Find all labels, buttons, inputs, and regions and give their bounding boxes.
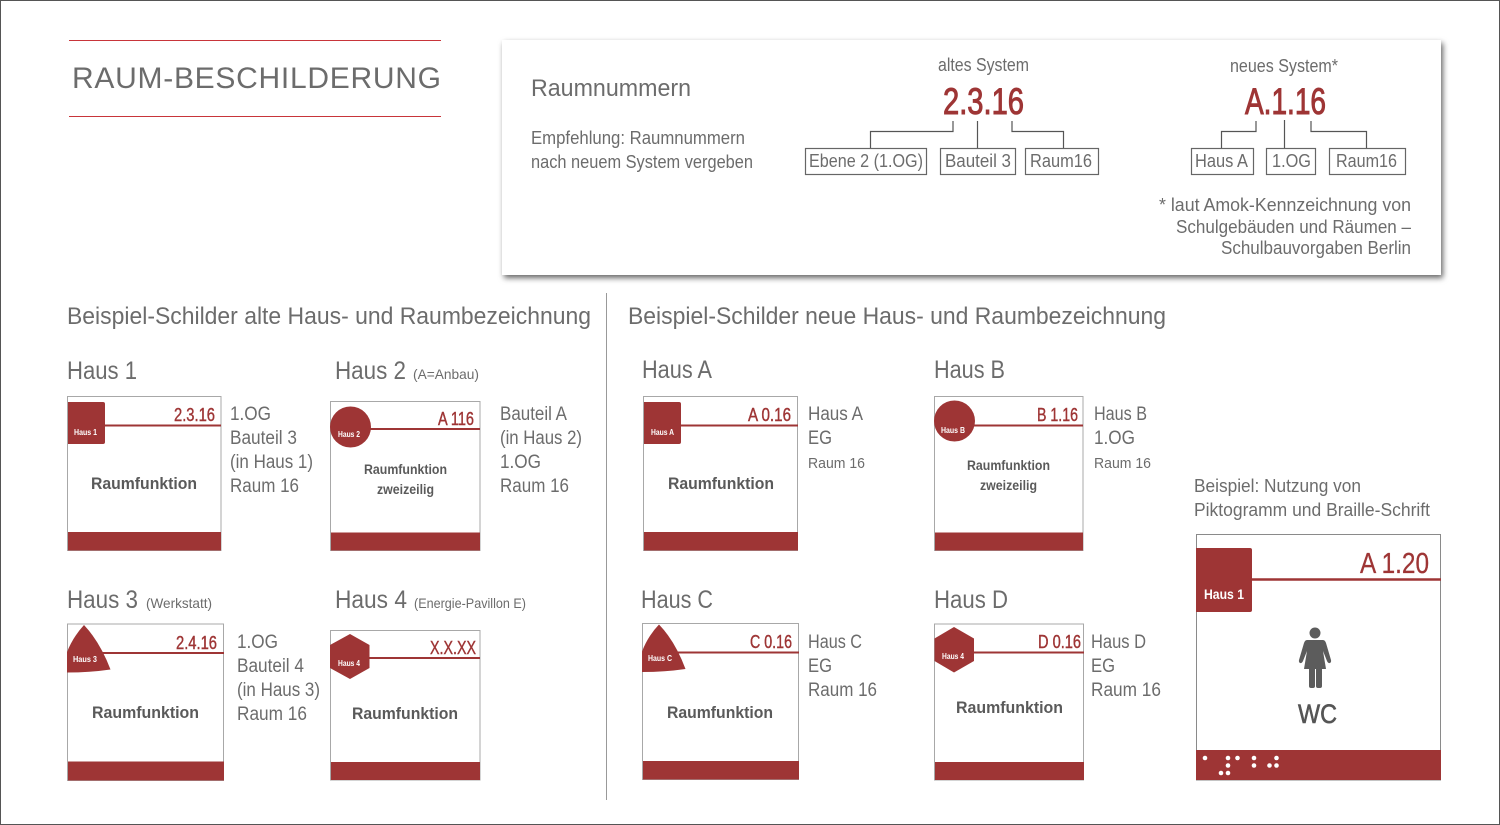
diagram: neues System xyxy=(1192,56,1406,174)
caption: Beispiel Piktogramm xyxy=(1194,476,1430,520)
description: Haus 1: 1.OG xyxy=(230,404,271,425)
description: Haus B xyxy=(1094,404,1151,472)
sign: Haus A xyxy=(644,396,798,550)
group: Haus 1: Haus 1 xyxy=(67,357,137,385)
sign: Haus C: C 0.16 xyxy=(750,632,792,652)
sign: Haus D: D 0.16 xyxy=(1038,632,1081,652)
group: Haus 3: (Werkstatt) xyxy=(146,595,212,611)
group: Haus A xyxy=(642,356,865,550)
text: Empfehlung: nach neuem System vergeben xyxy=(531,152,753,172)
sign: Haus B: Raumfunktion xyxy=(967,458,1050,473)
sign: Haus A: Haus A xyxy=(651,428,674,437)
description: Haus B: 1.OG xyxy=(1094,428,1135,449)
sign: Haus A: A 0.16 xyxy=(748,405,791,425)
group: Haus 1 xyxy=(67,357,313,550)
diagram: altes System: altes System xyxy=(938,55,1029,75)
sign: Haus 1: Raumfunktion xyxy=(91,474,197,493)
footnote: * laut Amok-Kennzeichnung von xyxy=(1159,195,1411,215)
group: Haus 2: (A=Anbau) xyxy=(413,366,479,382)
group: Haus C xyxy=(641,586,877,780)
sign: WC example: A 1.20 xyxy=(1360,548,1429,580)
description: Haus D: Haus D xyxy=(1091,632,1146,653)
group: Haus 2: Haus 2 xyxy=(335,357,406,385)
description: Haus 3 xyxy=(237,632,320,725)
group: Haus B: Haus B xyxy=(934,356,1005,384)
sign: Haus 4: Raumfunktion xyxy=(352,704,458,723)
group: Haus 2 xyxy=(330,357,582,550)
sign: Haus D: Raumfunktion xyxy=(956,698,1063,717)
description: Haus 1: Bauteil 3 xyxy=(230,428,297,449)
group: Haus C: Haus C xyxy=(641,586,713,614)
sign: Haus 2: Haus 2 xyxy=(338,430,360,439)
description: Haus A: Haus A xyxy=(808,404,863,425)
sign: Haus 4: X.X.XX xyxy=(430,638,476,658)
description: Haus B: Raum 16 xyxy=(1094,455,1151,472)
group: Haus B xyxy=(934,356,1151,550)
group: Haus 4: (Energie-Pavillon E) xyxy=(414,595,526,611)
label: WC: WC xyxy=(1298,699,1337,729)
sign: Haus 4 xyxy=(330,630,480,780)
footnote: Schulgebäuden und Räumen – xyxy=(1176,217,1411,237)
footnote xyxy=(1159,195,1411,258)
diagram: neues System: A.1.16 xyxy=(1245,81,1326,122)
diagram: altes System xyxy=(806,55,1098,174)
title: RAUM-BESCHILDERUNG xyxy=(72,62,441,95)
heading: neue Bezeichnung: Beispiel-Schilder neue Haus- und Raumbezeichnung xyxy=(628,303,1166,330)
description: Haus A: Raum 16 xyxy=(808,455,865,472)
group: Haus A: Haus A xyxy=(642,356,712,384)
diagram: neues System: neues System* xyxy=(1230,56,1338,76)
sign: Haus D: Haus 4 xyxy=(942,652,964,661)
sign: Haus C: Raumfunktion xyxy=(667,703,773,722)
group: Haus D xyxy=(934,586,1161,780)
text: Empfehlung: Empfehlung: Raumnummern xyxy=(531,128,745,148)
sign: Haus 2: zweizeilig xyxy=(377,482,434,497)
diagram: neues System: Haus A xyxy=(1195,151,1248,171)
group: Haus 3: Haus 3 xyxy=(67,586,138,614)
description: Haus C: Raum 16 xyxy=(808,680,877,701)
caption: Beispiel Piktogramm: Piktogramm und Braille-Schrift xyxy=(1194,500,1430,520)
sign: Haus B: B 1.16 xyxy=(1037,405,1078,425)
description: Haus 2: 1.OG xyxy=(500,452,541,473)
description: Haus 2 xyxy=(500,404,582,497)
description: Haus B: Haus B xyxy=(1094,404,1147,425)
description: Haus C: EG xyxy=(808,656,832,677)
sign: Haus 1: 2.3.16 xyxy=(174,405,215,425)
description: Haus 1: Raum 16 xyxy=(230,476,299,497)
group: Haus 3 xyxy=(67,586,320,780)
text: Empfehlung xyxy=(531,128,753,172)
description: Haus 3: (in Haus 3) xyxy=(237,680,320,701)
diagram: altes System: 2.3.16 xyxy=(943,81,1024,122)
sign: Haus 3: 2.4.16 xyxy=(176,633,217,653)
diagram: altes System: Ebene 2 (1.OG) xyxy=(809,151,923,171)
sign: Haus B: zweizeilig xyxy=(980,478,1037,493)
sign: Haus 3: Raumfunktion xyxy=(92,703,199,722)
sign: Haus B: Haus B xyxy=(941,426,965,435)
description: Haus A: EG xyxy=(808,428,832,449)
description: Haus 2: Raum 16 xyxy=(500,476,569,497)
group: Haus D: Haus D xyxy=(934,586,1008,614)
sign: Haus 1: Haus 1 xyxy=(74,428,97,437)
description: Haus D: Raum 16 xyxy=(1091,680,1161,701)
sign: WC example xyxy=(1196,534,1441,780)
sign: Haus D xyxy=(934,624,1084,780)
description: Haus 3: Raum 16 xyxy=(237,704,307,725)
description: Haus 2: (in Haus 2) xyxy=(500,428,582,449)
sign: Haus 3: Haus 3 xyxy=(73,655,98,664)
diagram: neues System: Raum16 xyxy=(1336,151,1397,171)
description: Haus A xyxy=(808,404,865,472)
caption: Beispiel Piktogramm: Beispiel: Nutzung von xyxy=(1194,476,1361,496)
sign: Haus A: Raumfunktion xyxy=(668,474,774,493)
diagram: neues System: 1.OG xyxy=(1272,151,1311,171)
footnote: Schulbauvorgaben Berlin xyxy=(1221,238,1411,258)
diagram: altes System: Bauteil 3 xyxy=(945,151,1011,171)
sign: WC example: Haus 1 xyxy=(1204,586,1244,602)
group: Haus 4 xyxy=(330,586,526,780)
description: Haus D xyxy=(1091,632,1161,701)
heading: alte Bezeichnung: Beispiel-Schilder alte Haus- und Raumbezeichnung xyxy=(67,303,591,330)
sign: Haus 2: Raumfunktion xyxy=(364,462,447,477)
sign: Haus 4: Haus 4 xyxy=(338,659,360,668)
sign: Haus 2: A 116 xyxy=(438,409,474,429)
braille dots xyxy=(1203,756,1279,775)
description: Haus 3: Bauteil 4 xyxy=(237,656,304,677)
group: Haus 4: Haus 4 xyxy=(335,586,407,614)
heading: Raumnummern: Raumnummern xyxy=(531,75,691,102)
sign: Haus C xyxy=(642,624,799,780)
description: Haus C: Haus C xyxy=(808,632,862,653)
diagram: altes System: Raum16 xyxy=(1030,151,1092,171)
description: Haus 1 xyxy=(230,404,313,497)
description: Haus C xyxy=(808,632,877,701)
description: Haus 2: Bauteil A xyxy=(500,404,567,425)
sign: Haus 1 xyxy=(68,396,221,550)
icon: woman pictogram xyxy=(1299,628,1331,688)
description: Haus 1: (in Haus 1) xyxy=(230,452,313,473)
sign: Haus 3 xyxy=(67,624,224,780)
description: Haus 3: 1.OG xyxy=(237,632,278,653)
description: Haus D: EG xyxy=(1091,656,1115,677)
sign: Haus C: Haus C xyxy=(648,654,672,663)
panel: Raumnummern xyxy=(502,40,1441,275)
sign: Haus B xyxy=(934,396,1083,550)
sign: Haus 2 xyxy=(330,402,480,550)
